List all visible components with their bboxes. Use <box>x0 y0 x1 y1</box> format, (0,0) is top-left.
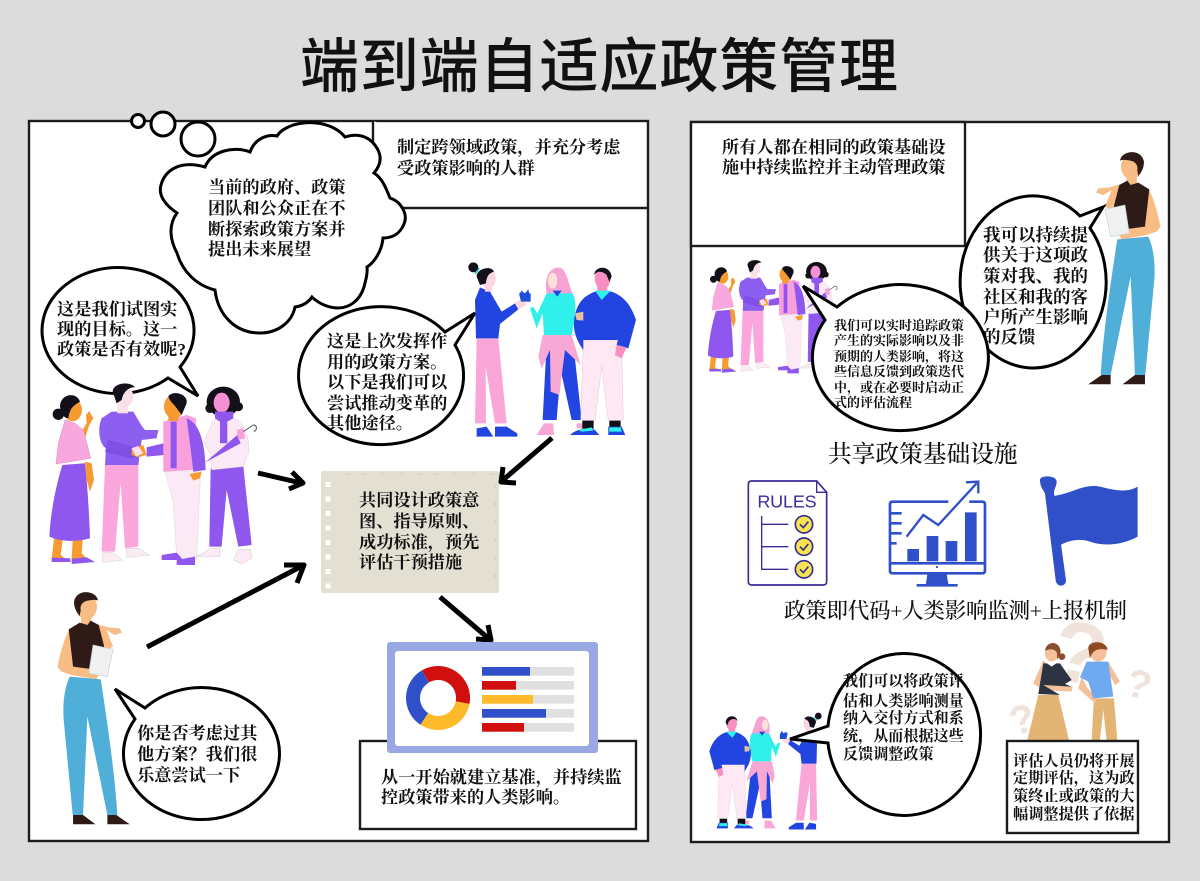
arrow: note to dashboard <box>440 597 491 640</box>
speech bubble: other options <box>115 688 279 820</box>
text: baseline: 从一开始就建立基准，并持续监 <box>381 767 622 788</box>
text: last policy: 尝试推动变革的 <box>327 393 447 413</box>
text: thought bubble: 团队和公众正在不 <box>208 198 346 218</box>
text: other options: 你是否考虑过其 <box>137 723 260 743</box>
text: monitor and manage: 所有人都在相同的政策基础设 <box>722 137 945 157</box>
text: co-design: 成功标准，预先 <box>359 532 479 553</box>
text: real-time tracking: 我们可以实时追踪政策 <box>834 318 964 333</box>
text: goal question: 这是我们试图实 <box>57 300 178 319</box>
text: continuous feedback: 户所产生影响 <box>983 307 1088 327</box>
text: continuous feedback: 社区和我的客 <box>983 287 1088 307</box>
text: co-design: 共同设计政策意 <box>359 490 480 510</box>
text: monitor and manage: 施中持续监控并主动管理政策 <box>722 157 945 177</box>
icon: rules checklist <box>748 481 827 585</box>
text: integrate measurement: 我们可以将政策评 <box>843 672 964 690</box>
text: real-time tracking: 产生的实际影响以及非 <box>834 333 964 348</box>
two evaluators with question marks <box>1005 601 1156 745</box>
donut chart <box>413 673 463 723</box>
panel: left <box>29 112 648 841</box>
dashboard card <box>387 642 598 753</box>
text: continuous feedback: 策对我、我的 <box>983 266 1088 286</box>
panel: right <box>691 122 1169 842</box>
text: thought bubble: 提出未来展望 <box>208 239 311 259</box>
text: periodic evaluation: 策终止或政策的大 <box>1013 787 1134 805</box>
woman with tablet, left <box>57 592 130 824</box>
two evaluators with question marks: ? <box>1121 661 1156 709</box>
text: co-design: 评估干预措施 <box>359 552 462 572</box>
two evaluators with question marks: ? <box>1005 696 1040 745</box>
text: real-time tracking: 中，或在必要时启动正 <box>834 380 964 396</box>
text box: shared infrastructure <box>691 122 965 246</box>
speech bubble: is the policy effective <box>42 268 198 396</box>
heading: shared infrastructure: 共享政策基础设施 <box>828 441 1018 468</box>
text: last policy: 以下是我们可以 <box>327 372 449 392</box>
text: baseline: 控政策带来的人类影响。 <box>381 787 570 807</box>
text: continuous feedback: 我可以持续提 <box>983 225 1088 245</box>
text: periodic evaluation: 评估人员仍将开展 <box>1013 752 1134 770</box>
text: last policy: 这是上次发挥作 <box>327 331 447 351</box>
text: continuous feedback: 供关于这项政 <box>983 245 1088 265</box>
text: integrate measurement: 反馈调整政策 <box>843 745 934 763</box>
icon: monitor with rising chart <box>890 482 985 587</box>
arrow: gift group to note <box>501 438 552 483</box>
people group: three people, mirrored <box>709 713 822 829</box>
speech bubble: last policy <box>299 307 475 445</box>
label: RULES: RULES <box>757 491 817 511</box>
two evaluators with question marks: ? <box>1043 601 1115 706</box>
text: thought bubble: 断探索政策方案并 <box>208 219 346 239</box>
text: real-time tracking: 些信息反馈到政策迭代 <box>834 364 964 379</box>
people group: four colleagues shaking hands <box>49 383 256 565</box>
speech bubble: integrate measurement <box>790 654 981 815</box>
text: other options: 乐意尝试一下 <box>137 765 241 785</box>
text: real-time tracking: 预期的人类影响，将这 <box>834 349 964 365</box>
speech bubble: continuous feedback <box>960 196 1106 368</box>
text: goal question: 现的目标。这一 <box>57 319 177 339</box>
text: cross-domain policy: 受政策影响的人群 <box>397 158 535 178</box>
text: last policy: 其他途径。 <box>327 413 413 433</box>
text box: baseline <box>360 741 636 829</box>
woman with tablet, right <box>1088 152 1161 384</box>
text: integrate measurement: 统，从而根据这些 <box>843 727 964 746</box>
text: periodic evaluation: 定期评估，这为政 <box>1013 770 1134 788</box>
text box: cross-domain policy <box>373 121 648 208</box>
speech bubble: real-time tracking <box>803 285 988 431</box>
title: 端到端自适应政策管理 <box>300 34 898 100</box>
arrow: group to note <box>258 472 303 489</box>
arrow: person to note <box>147 565 304 647</box>
text: integrate measurement: 估和人类影响测量 <box>843 692 964 710</box>
people group: three people exchanging a gift <box>468 262 636 437</box>
icon: blue flag <box>1040 476 1138 586</box>
text: co-design: 图、指导原则、 <box>359 511 479 531</box>
people group: four colleagues, small <box>708 260 837 373</box>
text: integrate measurement: 纳入交付方式和系 <box>843 709 965 727</box>
text: cross-domain policy: 制定跨领域政策，并充分考虑 <box>397 137 622 158</box>
text: other options: 他方案？我们很 <box>137 744 257 764</box>
note paper <box>321 471 499 593</box>
thought bubble <box>132 112 405 333</box>
bar list <box>482 667 574 732</box>
text box: periodic evaluation <box>1007 741 1138 833</box>
heading: policy as code: 政策即代码+人类影响监测+上报机制 <box>784 599 1127 623</box>
text: goal question: 政策是否有效呢? <box>57 339 186 359</box>
text: real-time tracking: 式的评估流程 <box>834 395 912 410</box>
text: last policy: 用的政策方案。 <box>327 352 447 372</box>
text: continuous feedback: 的反馈 <box>983 327 1036 347</box>
text: periodic evaluation: 幅调整提供了依据 <box>1013 805 1134 823</box>
text: thought bubble: 当前的政府、政策 <box>208 177 346 197</box>
